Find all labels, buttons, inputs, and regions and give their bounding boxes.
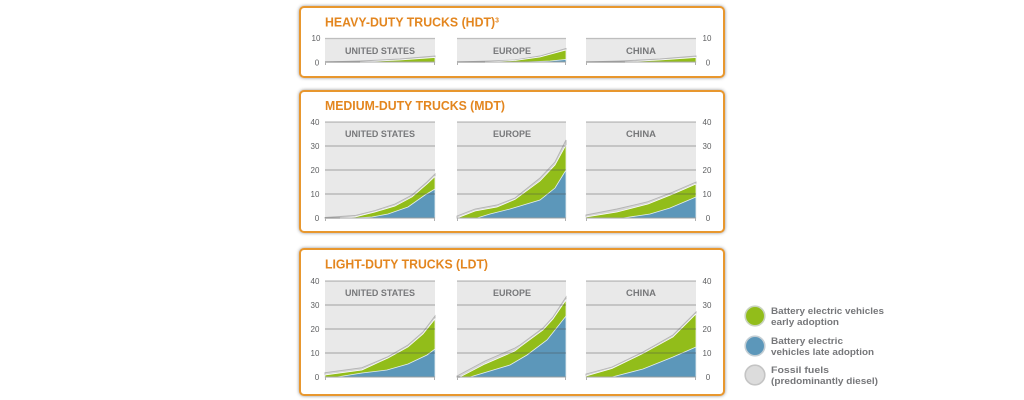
right axis labels: 10 [703, 190, 712, 199]
left axis labels: 40 [311, 118, 320, 127]
right axis labels [703, 34, 712, 68]
left axis labels: 40 [311, 277, 320, 286]
legend item: fossil fuels [745, 365, 878, 387]
legend item: late adoption: Battery electric [771, 336, 843, 347]
left axis labels: 30 [311, 301, 320, 310]
right axis labels: 0 [706, 214, 711, 223]
legend item: late adoption: vehicles late adoption [771, 347, 874, 358]
chart: MDT Europe [457, 122, 566, 221]
panel: light-duty trucks [300, 249, 724, 395]
chart: MDT Europe: EUROPE [493, 129, 531, 139]
left axis labels [312, 34, 321, 68]
chart: LDT China: CHINA [626, 288, 657, 298]
right axis labels: 30 [703, 301, 712, 310]
chart: HDT China [586, 38, 696, 65]
left axis labels: 0 [315, 373, 320, 382]
legend item: fossil fuels: (predominantly diesel) [771, 376, 878, 387]
chart: HDT China: CHINA [626, 46, 657, 56]
left axis labels: 0 [315, 214, 320, 223]
right axis labels: 40 [703, 277, 712, 286]
heading: medium-duty trucks: MEDIUM-DUTY TRUCKS (MDT) [325, 99, 505, 113]
chart: MDT United States: UNITED STATES [345, 129, 415, 139]
right axis labels [703, 277, 712, 382]
panel: medium-duty trucks [300, 91, 724, 232]
left axis labels: 20 [311, 325, 320, 334]
right axis labels: 40 [703, 118, 712, 127]
chart: HDT United States [325, 38, 435, 65]
legend item: late adoption [745, 336, 874, 358]
left axis labels: 10 [311, 190, 320, 199]
left axis labels [311, 277, 320, 382]
right axis labels: 20 [703, 166, 712, 175]
left axis labels: 20 [311, 166, 320, 175]
left axis labels: 0 [315, 58, 320, 68]
chart: LDT United States: UNITED STATES [345, 288, 415, 298]
legend item: fossil fuels: Fossil fuels [771, 365, 829, 376]
right axis labels [703, 118, 712, 223]
chart: MDT China [586, 122, 696, 221]
legend item: early adoption: Battery electric vehicles [771, 306, 884, 317]
chart: LDT Europe: EUROPE [493, 288, 531, 298]
chart: MDT China: CHINA [626, 129, 657, 139]
left axis labels [311, 118, 320, 223]
right axis labels: 0 [706, 58, 711, 68]
right axis labels: 30 [703, 142, 712, 151]
legend item: early adoption [745, 306, 884, 328]
left axis labels: 10 [311, 349, 320, 358]
heading: heavy-duty trucks: 3 [495, 18, 499, 24]
chart: HDT Europe: EUROPE [493, 46, 531, 56]
chart: LDT Europe [457, 281, 566, 380]
left axis labels: 10 [312, 34, 321, 43]
right axis labels: 0 [706, 373, 711, 382]
chart: LDT United States [325, 281, 435, 380]
heading: light-duty trucks: LIGHT-DUTY TRUCKS (LDT) [325, 258, 488, 272]
right axis labels: 10 [703, 34, 712, 43]
chart: MDT United States [325, 122, 435, 221]
right axis labels: 20 [703, 325, 712, 334]
heading: heavy-duty trucks: HEAVY-DUTY TRUCKS (HDT) [325, 16, 497, 30]
panel: heavy-duty trucks [300, 7, 724, 77]
right axis labels: 10 [703, 349, 712, 358]
chart: LDT China [586, 281, 696, 380]
legend [745, 306, 884, 387]
chart: HDT Europe [457, 38, 566, 65]
chart: HDT United States: UNITED STATES [345, 46, 415, 56]
left axis labels: 30 [311, 142, 320, 151]
legend item: early adoption: early adoption [771, 317, 839, 328]
